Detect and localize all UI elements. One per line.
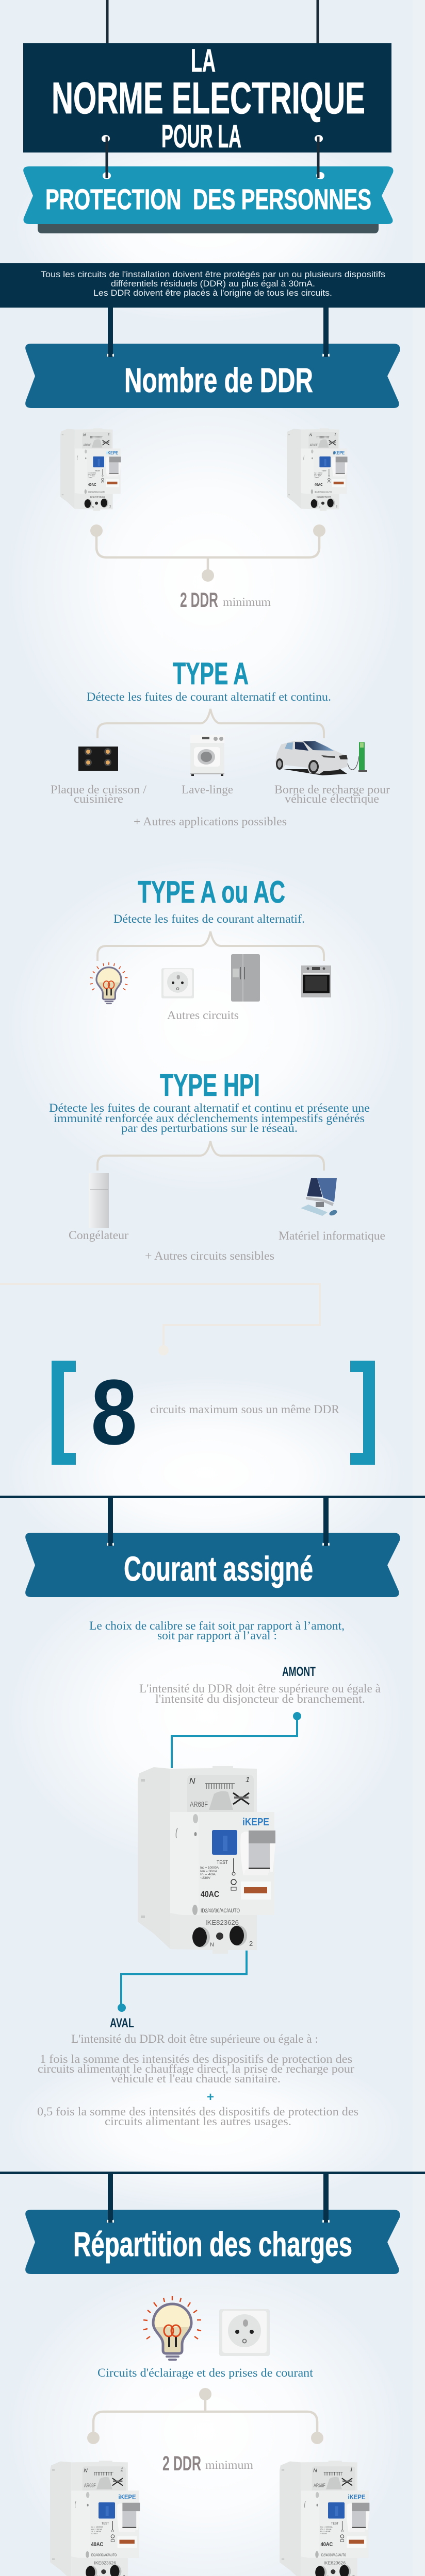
icon: freezer: [89, 1173, 109, 1228]
label washing machine: Lave-linge: [182, 783, 233, 796]
icon: light bulb: [90, 962, 127, 1004]
amont text: l'intensité du disjoncteur de branchement.: [155, 1692, 365, 1705]
two DDR minimum: 2 DDR: [162, 2452, 201, 2475]
label hob: Plaque de cuisson /: [51, 783, 147, 796]
two DDR minimum: 2 DDR: [180, 589, 218, 612]
icon: fridge: [231, 954, 260, 1002]
aval text: L'intensité du DDR doit être supérieure ou égale à :: [71, 2032, 318, 2045]
aval text: +: [207, 2090, 214, 2104]
type HPI description: par des perturbations sur le réseau.: [121, 1122, 298, 1134]
calibre intro text: Le choix de calibre se fait soit par rapport à l’amont,: [89, 1619, 345, 1632]
panel: type A ou AC: [90, 875, 331, 1022]
label other circuits: Autres circuits: [167, 1009, 239, 1022]
two DDR minimum: minimum: [223, 596, 271, 608]
brace: [97, 1141, 324, 1171]
aval text: circuits alimentant le chauffage direct, la prise de recharge pour: [38, 2062, 354, 2075]
icon: socket large: [219, 2309, 270, 2356]
brace: [97, 709, 324, 738]
right bracket: [350, 1361, 375, 1465]
icon: electric car and charger: [275, 741, 367, 775]
type A ou AC description: Détecte les fuites de courant alternatif.: [113, 912, 305, 925]
ribbon shadow: [38, 224, 379, 233]
title line pour la: POUR LA: [161, 118, 241, 155]
other sensitive circuits note: + Autres circuits sensibles: [145, 1249, 274, 1262]
eyelets and straps: [102, 135, 324, 179]
left bracket: [52, 1361, 76, 1465]
lighting and sockets caption: Circuits d'éclairage et des prises de courant: [97, 2366, 314, 2379]
intro strip: différentiels résiduels (DDR) au plus égal à 30mA.: [111, 279, 315, 289]
aval text: 1 fois la somme des intensités des dispositifs de protection des: [40, 2053, 352, 2065]
amont heading: AMONT: [282, 1665, 316, 1679]
label computer equipment: Matériel informatique: [279, 1229, 385, 1242]
icon: washing machine: [190, 735, 224, 776]
label charging station: [274, 783, 390, 805]
amont text: L'intensité du DDR doit être supérieure ou égale à: [139, 1682, 381, 1695]
title line la: LA: [191, 43, 216, 79]
DDR device left: [60, 428, 121, 511]
type A description: Détecte les fuites de courant alternatif et continu.: [87, 690, 331, 703]
DDR device right: [280, 2461, 369, 2576]
intro strip: Tous les circuits de l'installation doivent être protégés par un ou plusieurs dispositifs: [41, 269, 385, 279]
two DDR minimum: [180, 589, 271, 612]
intro strip: [0, 263, 425, 308]
icon: light bulb large: [143, 2296, 201, 2361]
label freezer: Congélateur: [69, 1229, 128, 1242]
icon: oven: [301, 965, 331, 997]
label hob: cuisinière: [74, 792, 123, 805]
brace: [97, 931, 324, 961]
type A ou AC heading: TYPE A ou AC: [138, 875, 285, 909]
amont connector: [172, 1712, 301, 1768]
aval text: circuits alimentant les autres usages.: [105, 2115, 291, 2128]
connector two DDR: [90, 524, 325, 582]
section divider: [0, 2172, 425, 2174]
connector split: [87, 2388, 323, 2444]
aval text: véhicule et l'eau chaude sanitaire.: [111, 2072, 281, 2085]
aval connector: [118, 1951, 247, 2012]
panel: nombre de DDR heading: [25, 308, 400, 408]
icon: gas hob: [78, 747, 118, 771]
icon: computer: [301, 1178, 338, 1216]
two DDR minimum: [162, 2452, 253, 2475]
section divider: [0, 1496, 425, 1498]
type A heading: TYPE A: [173, 656, 249, 691]
label charging station: véhicule électrique: [285, 792, 379, 805]
panel: nombre de DDR heading: Nombre de DDR: [124, 361, 313, 400]
panel: title sign: [23, 0, 393, 233]
calibre intro text: [89, 1619, 345, 1642]
DDR device right: [287, 428, 348, 511]
label charging station: Borne de recharge pour: [274, 783, 390, 796]
other applications note: + Autres applications possibles: [134, 815, 287, 828]
panel: eight circuits callout: [52, 1361, 375, 1465]
two DDR minimum: minimum: [205, 2459, 253, 2471]
panel: courant assigné heading: Courant assigné: [124, 1550, 313, 1588]
intro strip: Les DDR doivent être placés à l'origine de tous les circuits.: [93, 288, 332, 298]
type HPI description: [49, 1101, 370, 1134]
panel: répartition des charges heading: [25, 2174, 400, 2274]
navy title panel: [23, 43, 391, 152]
large DDR device: [138, 1766, 275, 1954]
type HPI description: Détecte les fuites de courant alternatif et continu et présente une: [49, 1101, 370, 1114]
aval heading: AVAL: [110, 2016, 134, 2030]
aval text: 0,5 fois la somme des intensités des dispositifs de protection des: [37, 2105, 358, 2118]
icon: socket: [161, 968, 194, 998]
panel: type A: [51, 656, 390, 828]
amont text: [139, 1682, 381, 1705]
type HPI heading: TYPE HPI: [160, 1068, 260, 1103]
number eight: 8: [91, 1361, 137, 1464]
decorative line to the number eight: [0, 1284, 320, 1355]
panel: courant assigné heading: [25, 1498, 400, 1597]
type HPI description: immunité renforcée aux déclenchements intempestifs générés: [54, 1112, 365, 1125]
aval text: [37, 2032, 358, 2128]
circuits maximum text: circuits maximum sous un même DDR: [150, 1403, 340, 1416]
calibre intro text: soit par rapport à l’aval :: [157, 1629, 277, 1642]
panel: type HPI: [49, 1068, 385, 1262]
label hob: [51, 783, 147, 805]
teal ribbon: [23, 166, 393, 224]
DDR device left: [50, 2461, 140, 2576]
